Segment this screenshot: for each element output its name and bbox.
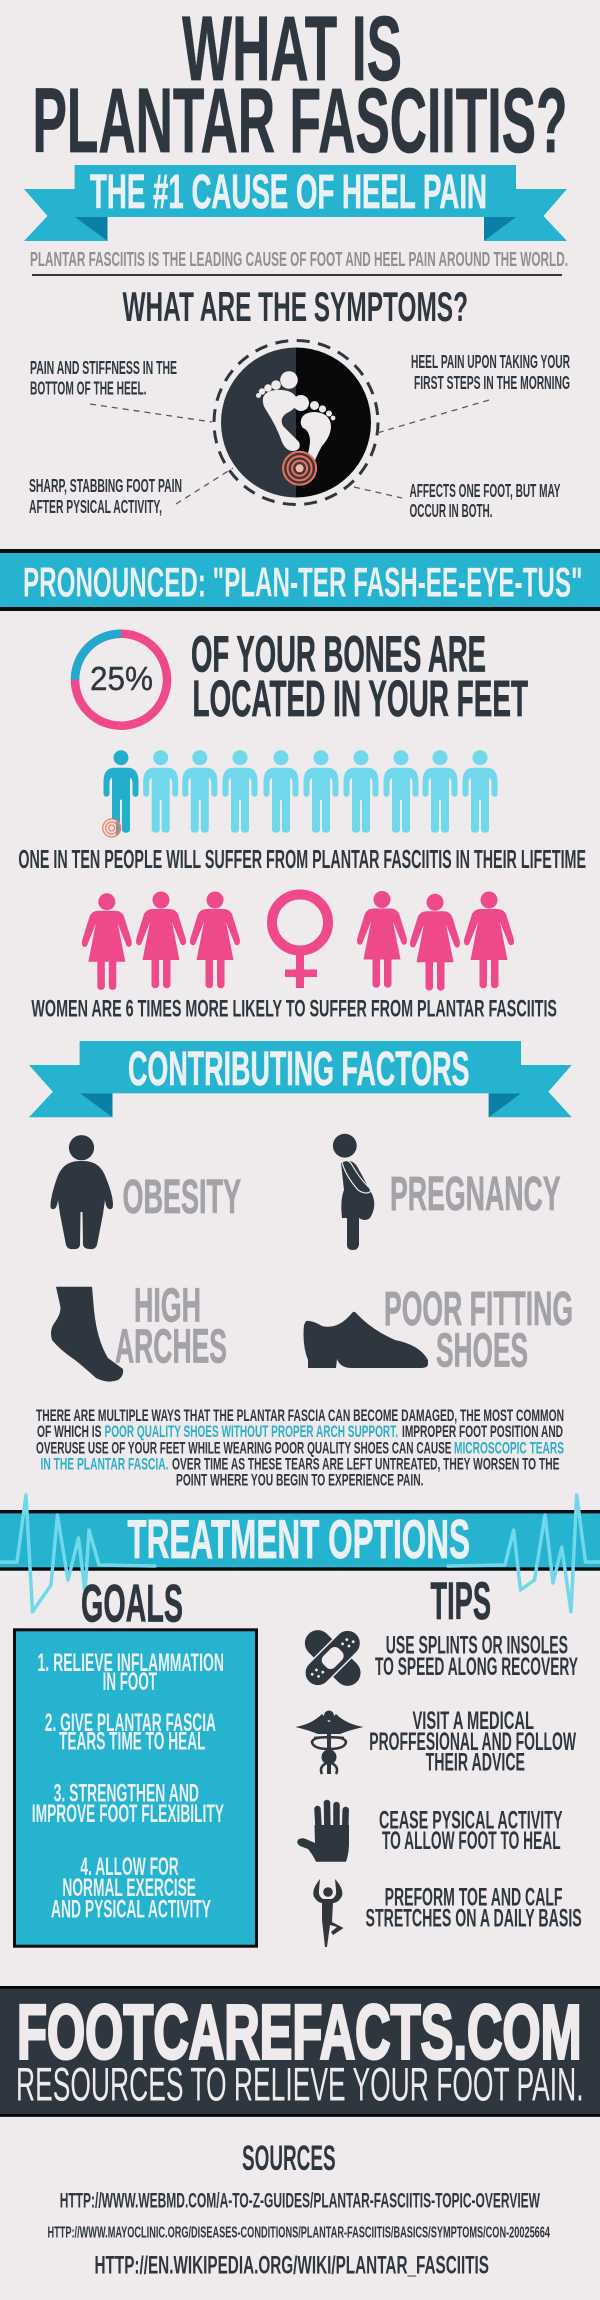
icon: caduceus [295,1710,364,1774]
panel: goals: 3. STRENGTHEN AND [54,1780,199,1808]
panel: goals: 4. ALLOW FOR [80,1853,179,1881]
icon: hand [297,1803,349,1862]
panel: goals: TEARS TIME TO HEAL [59,1727,206,1755]
ribbon: the #1 cause of heel pain [24,165,567,241]
panel: goals: AND PYSICAL ACTIVITY [51,1895,211,1923]
icon: bandage [299,1625,366,1691]
symptom: pain and stiffness [30,358,177,398]
panel: goals [14,1630,256,1946]
symptom: affects one foot: OCCUR IN BOTH. [410,501,492,521]
symptom: pain and stiffness: PAIN AND STIFFNESS IN THE [30,358,177,378]
band: footcarefacts.com [0,1986,600,2117]
tip: visit a medical professional: THEIR ADVICE [426,1749,525,1777]
stat: bones in feet [191,626,528,727]
text block: explanation paragraph: POINT WHERE YOU BEGIN TO EXPERIENCE PAIN. [176,1470,424,1489]
tip: visit a medical professional [369,1707,576,1777]
panel: goals: 2. GIVE PLANTAR FASCIA [45,1709,216,1737]
chart: 25 percent donut [75,634,167,726]
tip: splints or insoles [375,1631,578,1681]
text block: source urls [48,2189,550,2279]
icon: shoe [304,1312,428,1368]
panel: goals: IN FOOT [103,1668,157,1696]
icon: heartbeat line left [0,1495,155,1612]
text block: explanation paragraph: OF WHICH IS [37,1422,102,1441]
heading: sources: SOURCES [242,2138,336,2178]
icon: heartbeat line right [448,1495,600,1612]
title: WHAT IS [182,0,402,100]
icon: pregnant figure [333,1134,374,1250]
tip: cease physical activity [379,1806,563,1855]
icon: obesity figure [50,1135,113,1249]
icon: high arch foot [51,1287,123,1382]
label: high arches: HIGH [134,1280,201,1333]
label: obesity: OBESITY [122,1171,241,1224]
symptom: sharp stabbing pain [29,476,182,517]
label: poor fitting shoes: SHOES [436,1325,528,1378]
chart: 25 percent donut: 25% [90,660,153,697]
label: poor fitting shoes [384,1283,573,1378]
text block: explanation paragraph: IN THE PLANTAR FASCIA. [40,1454,168,1473]
panel: goals: IMPROVE FOOT FLEXIBILITY [32,1800,224,1828]
label: high arches: ARCHES [115,1321,227,1374]
text block: explanation paragraph: POOR QUALITY SHOES WITHOUT PROPER ARCH SUPPORT. [104,1422,398,1441]
ribbon: contributing factors [29,1041,572,1117]
symptom: affects one foot [410,481,560,521]
panel: goals: 1. RELIEVE INFLAMMATION [38,1649,224,1677]
heading: tips: TIPS [430,1572,491,1631]
heading: goals: GOALS [81,1575,183,1634]
dashed connector lines [90,400,489,504]
symptom: sharp stabbing pain: AFTER PYSICAL ACTIVITY, [29,497,162,517]
symptom: pain and stiffness: BOTTOM OF THE HEEL. [30,378,146,398]
title [32,0,568,172]
icon: yoga stretch figure [313,1879,344,1947]
label: high arches [115,1280,227,1374]
pictogram: one in ten people [103,750,497,837]
text block: explanation paragraph [36,1406,564,1489]
tip: stretches [366,1884,582,1933]
pictogram: women and female symbol [82,891,514,991]
symptom: sharp stabbing pain: SHARP, STABBING FOOT PAIN [29,476,182,496]
symptom: heel pain upon first steps [411,352,570,393]
panel: goals: NORMAL EXERCISE [62,1874,196,1902]
icon: feet in circle with pain target [214,340,378,504]
